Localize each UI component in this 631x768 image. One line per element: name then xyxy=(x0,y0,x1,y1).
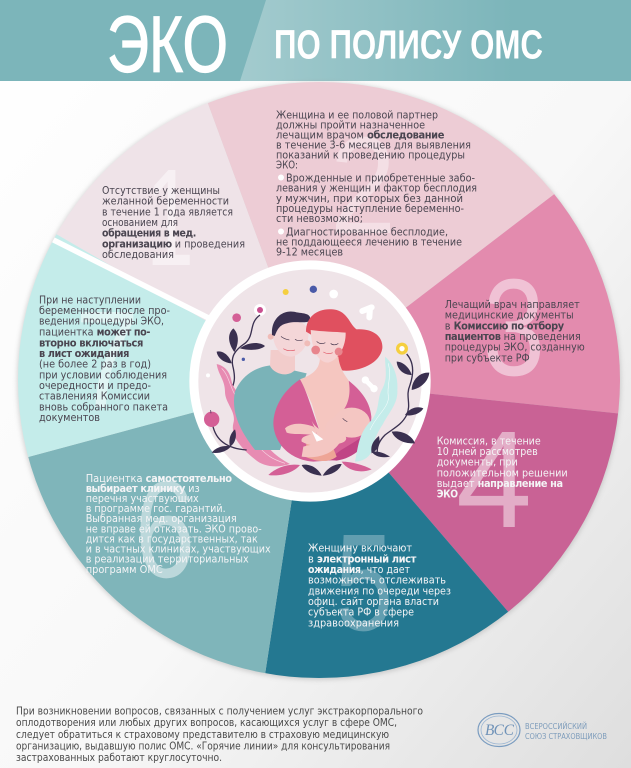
mint ribbon xyxy=(355,357,397,462)
text block 5 xyxy=(308,544,451,629)
text block 1: в течение 1 года является xyxy=(102,207,233,218)
text block 2: Врожденные и приобретенные забо- xyxy=(286,174,475,185)
text block 7: пациентка может по- xyxy=(39,328,150,339)
right branch xyxy=(371,354,429,457)
numeral 1: 1 xyxy=(146,141,194,295)
text block 6: перечня участвующих xyxy=(86,494,199,505)
text block 6: Выбранная мед. организация xyxy=(86,514,237,525)
text block 3: процедуры ЭКО, созданную xyxy=(445,343,585,354)
panel 1 background xyxy=(57,104,268,320)
text block 5: офиц. сайт органа власти xyxy=(308,597,439,608)
text block 7: вторно включаться xyxy=(39,338,143,349)
text block 7: очередности и предо- xyxy=(39,381,151,392)
logo: ВСС: СОЮЗ СТРАХОВЩИКОВ xyxy=(525,732,607,741)
bottom leaves xyxy=(268,462,372,476)
panel 6 background xyxy=(28,412,292,673)
title: ЭКО: ЭКО xyxy=(107,0,228,88)
text block 6: и в частных клиниках, участвующих xyxy=(86,545,271,556)
text block 7: ставленияя Комиссии xyxy=(39,392,150,403)
left branch xyxy=(217,315,265,388)
text block 3: медицинские документы xyxy=(445,311,574,322)
numeral 2: 2 xyxy=(330,109,396,263)
text block 7: ведения процедуры ЭКО, xyxy=(39,317,164,328)
text block 2: должны пройти назначенное xyxy=(276,120,425,131)
text block 7: вновь собранного пакета xyxy=(39,402,168,413)
text block 2 xyxy=(276,110,477,259)
text block 5: в электронный лист xyxy=(308,554,416,565)
numeral 5: 5 xyxy=(335,506,393,660)
panel 3 background xyxy=(406,194,620,414)
text block 3: в Комиссию по отбору xyxy=(445,320,564,332)
numeral 6: 6 xyxy=(135,453,195,607)
panel 2 background xyxy=(208,82,554,308)
footer note: оплодотворения или любых других вопросов, касающихся услуг в сфере ОМС, xyxy=(16,718,397,729)
text block 1: желанной беременности xyxy=(102,197,229,208)
text block 7: в лист ожидания xyxy=(39,349,129,360)
text block 2: Диагностированное бесплодие, xyxy=(286,228,448,239)
text block 6: не вправе ей отказать. ЭКО прово- xyxy=(86,525,262,536)
text block 1: организацию и проведения xyxy=(102,239,245,250)
numeral 4: 4 xyxy=(456,403,532,557)
header band xyxy=(0,0,631,88)
circular diagram shadow xyxy=(17,82,621,680)
apple branch xyxy=(204,410,247,453)
man's head xyxy=(273,320,309,357)
text block 4: 10 дней рассмотрев xyxy=(437,447,538,458)
text block 2: не поддающееся лечению в течение xyxy=(276,238,462,249)
woman's face xyxy=(311,330,346,363)
text block 7: При не наступлении xyxy=(39,295,141,306)
footer note: организацию, выдавшую полис ОМС. «Горячие линии» для консультирования xyxy=(16,742,390,752)
text block 7: беременности после про- xyxy=(39,306,170,317)
baby xyxy=(285,408,370,457)
text block 3: Лечащий врач направляет xyxy=(445,300,580,311)
text block 3 xyxy=(445,300,585,364)
text block 7: при условии соблюдения xyxy=(39,370,167,381)
text block 1: обследования xyxy=(102,250,174,261)
text block 6: в реализации территориальных xyxy=(86,555,249,566)
central illustration: family xyxy=(189,260,431,502)
text block 5: здравоохранения xyxy=(308,618,399,629)
logo: ВСС: ВСС xyxy=(485,722,514,739)
text block 5: ожидания, что дает xyxy=(308,565,410,576)
text block 6: программ ОМС xyxy=(86,565,163,576)
woman's hair xyxy=(306,309,382,371)
text block 2: в течение 3-6 месяцев для выявления xyxy=(276,140,471,151)
text block 2: сти невозможно; xyxy=(276,214,363,225)
panel 7 background xyxy=(18,234,206,457)
footer note: застрахованных работают круглосуточно. xyxy=(16,753,222,764)
pink ribbon xyxy=(217,364,290,466)
logo: ВСС xyxy=(478,714,607,746)
text block 5: субъекта РФ в сфере xyxy=(308,608,414,619)
man's shirt xyxy=(234,365,307,450)
text block 6 xyxy=(86,474,271,576)
panel 5 background xyxy=(265,472,508,678)
text block 7: документов xyxy=(39,413,100,424)
text block 5: Женщину включают xyxy=(308,544,412,555)
text block 6: Пациентка самостоятельно xyxy=(86,474,232,485)
text block 3: пациентов на проведения xyxy=(445,332,581,343)
subtitle: по полису ОМС: ПО ПОЛИСУ ОМС xyxy=(274,22,543,68)
woman's neck and chest xyxy=(300,357,351,443)
text block 1: Отсутствие у женщины xyxy=(102,186,220,197)
text block 4: ЭКО xyxy=(437,489,458,500)
text block 4: выдает направление на xyxy=(437,479,563,490)
footer note xyxy=(16,706,423,764)
text block 7: (не более 2 раз в год) xyxy=(39,360,151,371)
ring xyxy=(189,260,431,502)
text block 7 xyxy=(39,295,170,424)
text block 2: лечащим врачом обследование xyxy=(276,129,444,141)
text block 6: дится как в государственных, так xyxy=(86,535,258,546)
text block 2: 9-12 месяцев xyxy=(276,248,343,259)
text block 5: движения по очереди через xyxy=(308,586,451,597)
panel 4 background xyxy=(388,394,618,612)
decorative dots xyxy=(206,286,408,392)
footer note: При возникновении вопросов, связанных с получением услуг экстракорпорального xyxy=(16,706,423,718)
text block 2: показаний к проведению процедуры xyxy=(276,150,465,161)
text block 4: Комиссия, в течение xyxy=(437,436,541,447)
text block 2: процедуры наступление беременно- xyxy=(276,204,464,215)
text block 3: при субъекте РФ xyxy=(445,353,530,364)
numeral 7: 7 xyxy=(75,283,139,437)
woman's robe xyxy=(273,379,371,462)
text block 6: выбирает клинику из xyxy=(86,483,200,495)
man's neck xyxy=(270,350,295,374)
text block 2: Женщина и ее половой партнер xyxy=(276,110,438,121)
logo wordmark: ВСЕРОССИЙСКИЙ xyxy=(525,722,587,731)
numeral 3: 3 xyxy=(483,251,545,405)
text block 1 xyxy=(102,186,245,261)
text block 2: ЭКО: xyxy=(276,160,298,171)
text block 2: у мужчин, при которых без данной xyxy=(276,194,463,205)
text block 5: возможность отслеживать xyxy=(308,576,446,587)
text block 1: обращения в мед. xyxy=(102,228,196,240)
big numerals xyxy=(75,109,545,660)
text block 4 xyxy=(437,436,568,500)
text block 6: в программе гос. гарантий. xyxy=(86,504,226,515)
text block 2: левания у женщин и фактор бесплодия xyxy=(276,184,477,195)
text block 4: документы, при xyxy=(437,458,518,469)
man's hair xyxy=(272,311,310,336)
text block 1: основанием для xyxy=(102,218,178,229)
footer note: следует обратиться к страховому представителю в страховую медицинскую xyxy=(16,730,389,741)
text block 4: положительном решении xyxy=(437,468,568,479)
circular diagram segments xyxy=(18,82,620,678)
